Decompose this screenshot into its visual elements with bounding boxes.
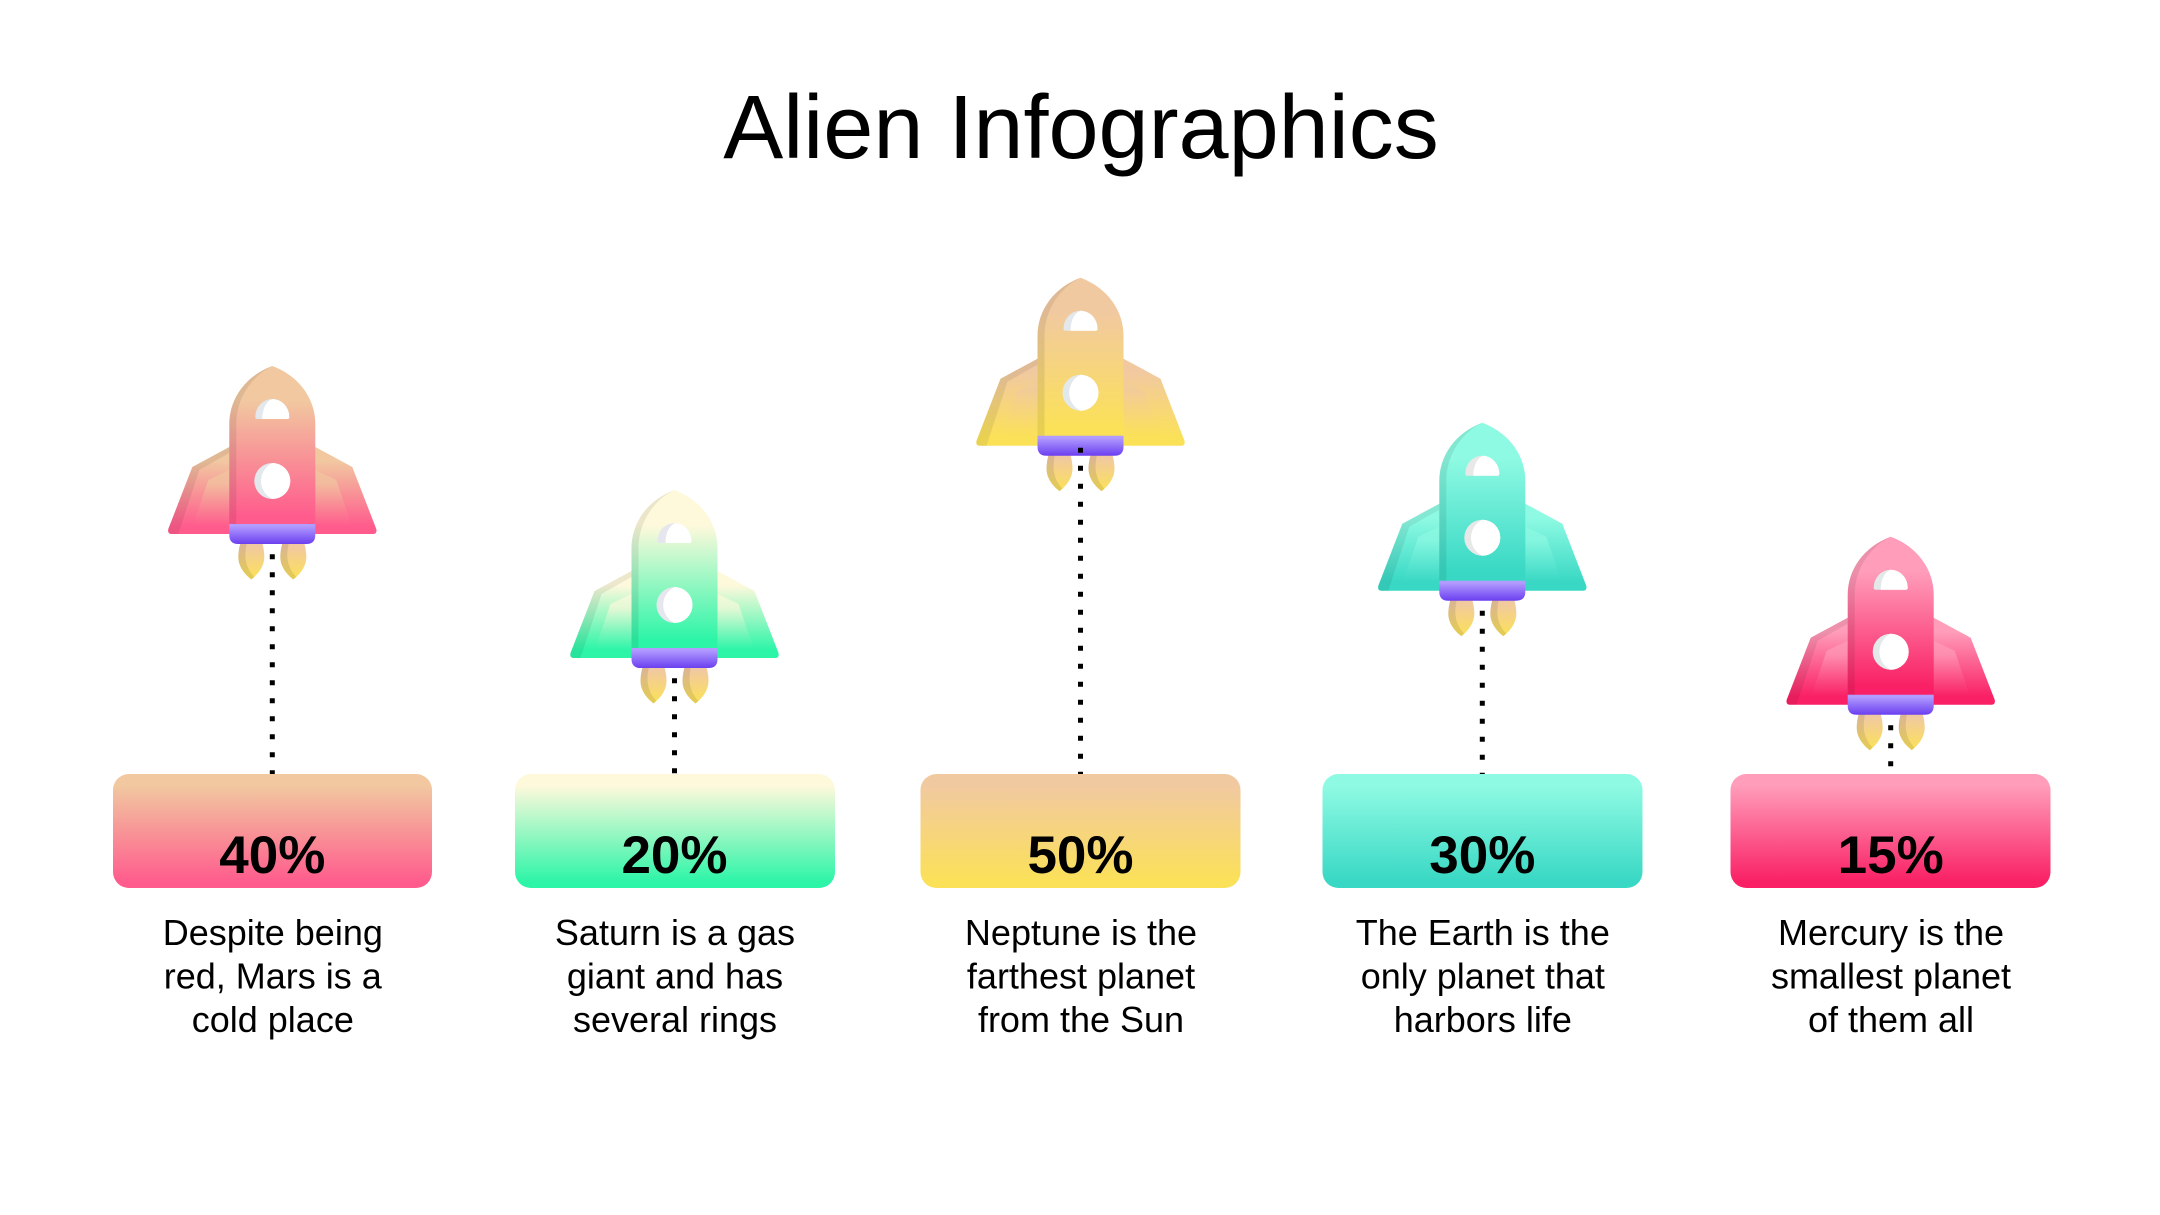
value box [1730,774,2050,888]
value: 20% [621,826,728,885]
description: Mercury is the [1778,912,2004,953]
description: Saturn is a gas [555,912,795,953]
panel: Earth 30% [1322,423,1642,1040]
description: farthest planet [967,956,1195,996]
value: 40% [219,826,325,885]
dotted line [270,554,275,776]
description: The Earth is the [1356,912,1610,953]
icon: rocket Saturn [570,490,779,704]
icon: rocket Mars [168,366,376,580]
icon: rocket Neptune [976,278,1185,491]
dotted line [1480,611,1485,776]
title: Alien Infographics [723,78,1439,178]
description: giant and has [567,956,783,996]
panel: Mercury 15% [1730,537,2050,1040]
panel: Mars 40% [113,366,432,1040]
description: cold place [192,999,354,1040]
value: 30% [1429,826,1535,885]
description: smallest planet [1771,956,2011,996]
description: several rings [573,999,777,1040]
dotted line [1888,725,1893,770]
value: 15% [1838,826,1944,885]
icon: rocket Mercury [1786,537,1995,750]
description: Despite being [163,912,383,953]
description: from the Sun [978,999,1184,1040]
description: harbors life [1394,999,1572,1040]
value box [920,774,1240,888]
description: of them all [1808,999,1974,1040]
value box [113,774,432,888]
dotted line [672,678,677,776]
panel: Neptune 50% [920,278,1240,1040]
value box [1322,774,1642,888]
icon: rocket Earth [1378,423,1586,636]
value: 50% [1027,826,1134,885]
description: only planet that [1361,956,1605,996]
description: red, Mars is a [164,956,383,996]
dotted line [1078,448,1083,776]
value box [515,774,835,888]
description: Neptune is the [965,912,1197,953]
panel: Saturn 20% [515,490,835,1040]
